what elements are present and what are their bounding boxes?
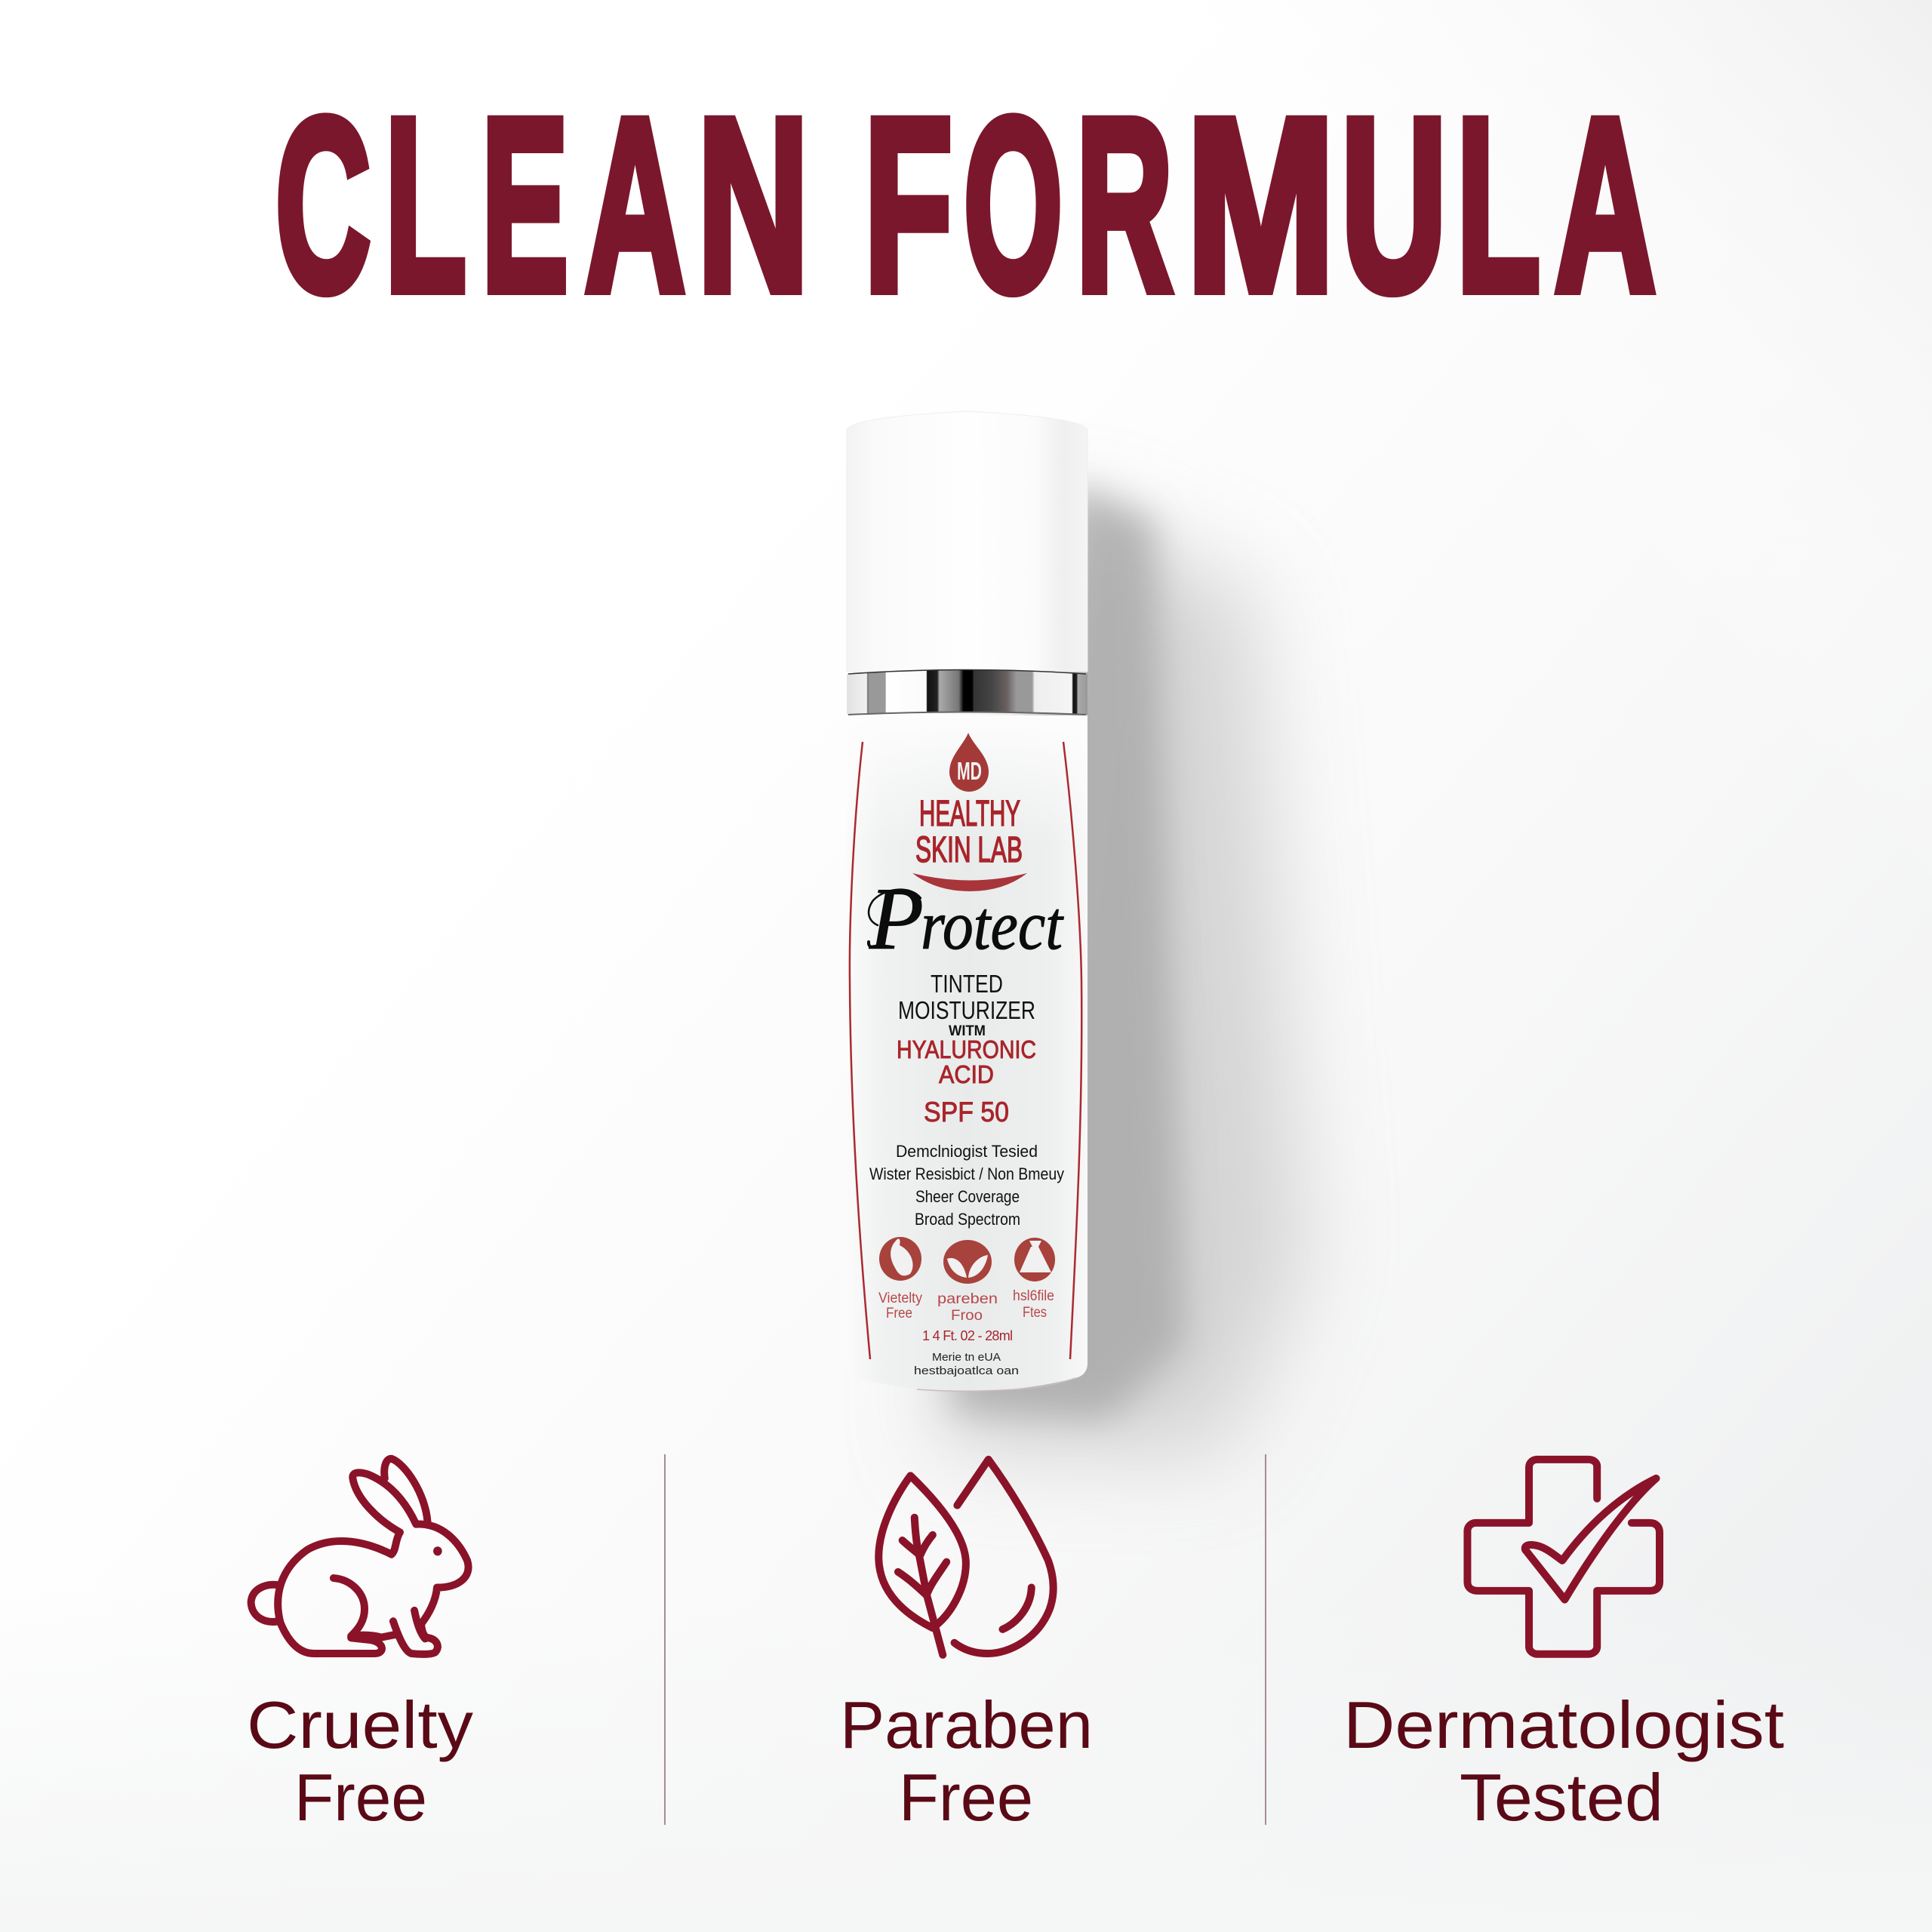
chrome band (847, 670, 1088, 715)
title: M (1186, 68, 1335, 343)
feature: paraben free (840, 1460, 1093, 1835)
title: A (585, 68, 685, 343)
brand name: HEALTHY (919, 794, 1020, 834)
title: F (864, 68, 952, 343)
label: paraben free: Paraben (840, 1687, 1093, 1762)
label icon captions: Ftes (1023, 1305, 1047, 1321)
product description (897, 970, 1036, 1128)
title: E (481, 68, 568, 343)
product claims (869, 1142, 1064, 1229)
label icon captions: hsl6file (1013, 1288, 1054, 1304)
product claims: Sheer Coverage (915, 1187, 1020, 1206)
title: U (1341, 68, 1447, 343)
brand name (915, 794, 1023, 870)
label icon captions: Vietelty (878, 1291, 922, 1306)
icon: rabbit (251, 1459, 469, 1654)
product name script: P (869, 869, 924, 968)
title: R (1076, 68, 1173, 343)
divider (1265, 1454, 1266, 1825)
label: dermatologist tested: Tested (1460, 1760, 1663, 1835)
label icon: flask badge (1014, 1238, 1055, 1281)
product description: ACID (939, 1060, 994, 1088)
maker lines (914, 1351, 1019, 1377)
title: N (697, 68, 809, 343)
label icon captions: pareben (937, 1291, 998, 1307)
product description: TINTED (931, 970, 1003, 998)
title: A (1555, 68, 1656, 343)
label border lines (850, 742, 1081, 1359)
label icon captions: Free (886, 1306, 912, 1321)
label: paraben free: Free (899, 1760, 1033, 1835)
title: L (385, 68, 466, 343)
label: dermatologist tested (1343, 1687, 1784, 1835)
product name script (869, 869, 1064, 968)
product bottle (847, 411, 1088, 1392)
product claims: Wister Resisbict / Non Bmeuy (869, 1164, 1064, 1183)
divider (664, 1454, 666, 1825)
label: cruelty free (247, 1687, 473, 1835)
label: cruelty free: Free (294, 1760, 427, 1835)
product description: MOISTURIZER (898, 996, 1035, 1024)
maker lines: Merie tn eUA (932, 1351, 1001, 1364)
label icon captions (878, 1288, 1054, 1324)
volume line: 1 4 Ft. 02 - 28ml (922, 1328, 1013, 1343)
title: C (275, 68, 371, 343)
bottle shadow (936, 483, 1306, 1457)
product claims: Broad Spectrom (915, 1210, 1020, 1229)
brand name: SKIN LAB (915, 830, 1023, 870)
brand drop logo: MD (957, 757, 982, 785)
product description: HYALURONIC (897, 1035, 1036, 1063)
title: L (1457, 68, 1540, 343)
icon: leaf and drop (878, 1460, 1054, 1655)
feature: dermatologist tested (1343, 1460, 1784, 1835)
bottle cap (847, 411, 1088, 672)
label icon: leaf badge (943, 1240, 992, 1284)
feature: cruelty free (247, 1459, 473, 1835)
product name script: rotect (921, 887, 1064, 964)
brand drop logo (949, 733, 989, 792)
label: dermatologist tested: Dermatologist (1343, 1687, 1784, 1762)
label icon: rabbit badge (879, 1237, 921, 1281)
label: paraben free (840, 1687, 1093, 1835)
bottle body (847, 715, 1088, 1392)
label: cruelty free: Cruelty (247, 1687, 473, 1762)
product description: WITM (949, 1023, 986, 1039)
maker lines: hestbajoatlca oan (914, 1364, 1019, 1377)
product description: SPF 50 (924, 1097, 1009, 1128)
icon: medical cross with check (1467, 1460, 1660, 1654)
swoosh (912, 873, 1027, 891)
label icon captions: Froo (951, 1308, 983, 1324)
title: O (964, 68, 1063, 343)
product claims: Demclniogist Tesied (896, 1142, 1038, 1161)
